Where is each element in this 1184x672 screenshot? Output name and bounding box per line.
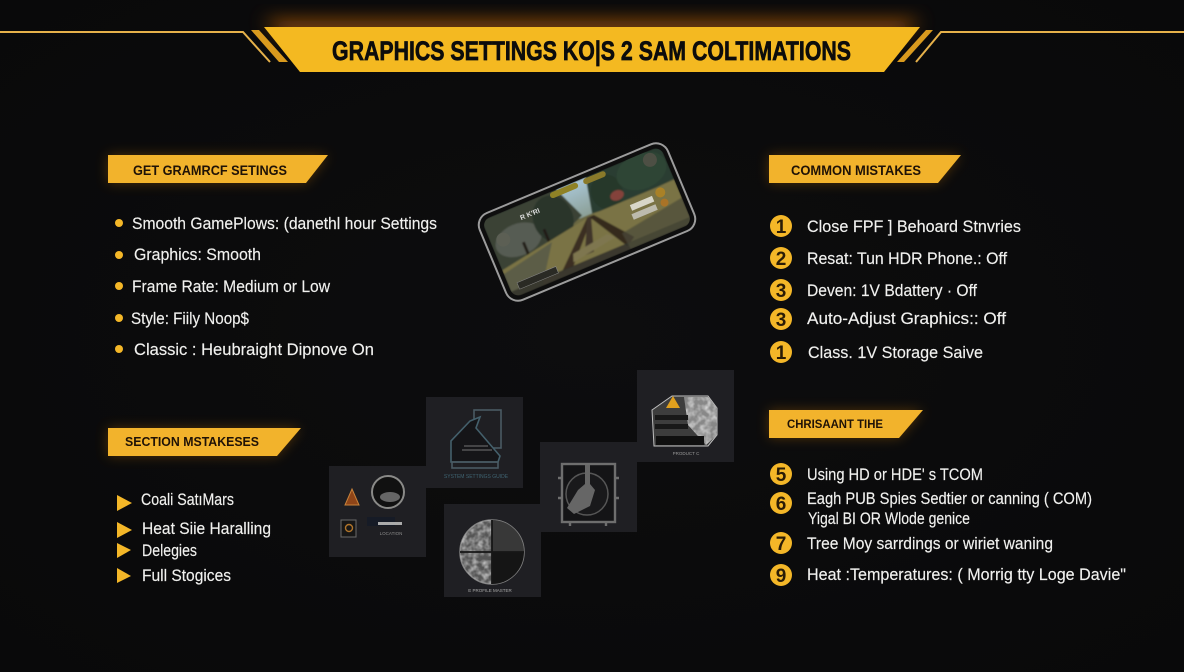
bullet list: Style: Fiily Noop$ xyxy=(131,309,249,328)
bullet list: Graphics: Smooth xyxy=(134,245,261,264)
numbered tips: Eagh PUB Spies Sedtier or canning ( COM) xyxy=(807,489,1092,508)
numbered tips: Heat :Temperatures: ( Morrig tty Loge Davie" xyxy=(807,565,1126,584)
arrow list: Heat Siie Haralling xyxy=(142,519,271,538)
card caption: PRODUCT C xyxy=(673,451,700,456)
bullet list: Classic : Heubraight Dipnove On xyxy=(134,340,374,359)
arrow list: Full Stogices xyxy=(142,566,231,585)
numbered tips: 5 xyxy=(776,465,787,486)
icon: framed fan xyxy=(558,464,619,526)
panel: constant tips list xyxy=(769,410,1126,587)
arrow list: Coali SatıMars xyxy=(141,490,234,509)
bullet list: Smooth GamePlows: (danethl hour Settings xyxy=(132,214,437,233)
heading: constant time: CHRISAANT TIHE xyxy=(787,417,883,431)
card caption: LOCATION xyxy=(380,531,402,536)
card caption: E PROFILE MASTER xyxy=(468,588,513,593)
heading: common mistakes xyxy=(769,155,961,183)
numbered list: 2 xyxy=(776,249,786,270)
numbered list: Close FPF ] Behoard Stnvries xyxy=(807,217,1021,236)
panel: icon card 5 xyxy=(637,370,734,462)
numbered list: 1 xyxy=(776,343,787,364)
numbered list: Deven: 1V Bdattery · Off xyxy=(807,281,977,300)
numbered list: 1 xyxy=(776,217,787,238)
heading: section mistakes: SECTION MSTAKESES xyxy=(125,434,259,449)
icon: small square xyxy=(341,520,356,537)
panel: icon card 3 xyxy=(444,504,541,597)
numbered list: Class. 1V Storage Saive xyxy=(808,343,983,362)
game screen xyxy=(481,144,693,298)
numbered list xyxy=(770,215,1021,364)
heading: constant time xyxy=(769,410,923,438)
arrow list xyxy=(117,490,271,585)
bullet list: Frame Rate: Medium or Low xyxy=(132,277,331,296)
panel: common mistakes list xyxy=(769,155,1021,364)
numbered tips: 6 xyxy=(776,494,786,515)
numbered tips: Tree Moy sarrdings or wiriet waning xyxy=(807,534,1053,553)
panel: section mistakes list xyxy=(108,428,301,585)
heading: section mistakes xyxy=(108,428,301,456)
phone illustration xyxy=(475,139,699,305)
card caption: SYSTEM SETTINGS GUIDE xyxy=(444,474,509,480)
bullet list xyxy=(115,214,437,359)
icon: crosshair dial xyxy=(460,520,524,584)
game HUD: R K'RI xyxy=(519,208,541,222)
numbered tips: Using HD or HDE' s TCOM xyxy=(807,465,983,484)
heading: graphics settings xyxy=(108,155,328,183)
heading: graphics settings: GET GRAMRCF SETINGS xyxy=(133,162,287,178)
panel: icon card 4 xyxy=(540,442,637,532)
numbered tips: Yigal BI OR Wlode genice xyxy=(808,509,970,528)
panel: icon card 1 xyxy=(329,466,426,557)
numbered tips xyxy=(770,463,1126,587)
numbered list: Auto-Adjust Graphics:: Off xyxy=(807,309,1006,328)
numbered tips: 7 xyxy=(776,534,786,555)
numbered tips: 9 xyxy=(776,566,786,587)
numbered list: Resat: Tun HDR Phone.: Off xyxy=(807,249,1007,268)
game HUD xyxy=(496,153,668,290)
numbered list: 3 xyxy=(776,281,786,302)
arrow list: Delegies xyxy=(142,541,197,560)
numbered list: 3 xyxy=(776,310,786,331)
title: GRAPHICS SETTINGS KO|S 2 SAM COLTIMATIONS xyxy=(332,36,851,66)
heading: common mistakes: COMMON MISTAKES xyxy=(791,162,921,178)
icon: hardware emblem xyxy=(652,396,717,446)
icon: warning triangle xyxy=(345,489,359,505)
icon: outlined device xyxy=(451,410,501,468)
icon: round gauge xyxy=(372,476,404,508)
panel: icon card 2 xyxy=(426,397,523,488)
title banner xyxy=(0,20,1184,72)
panel: graphics settings list xyxy=(108,155,437,359)
